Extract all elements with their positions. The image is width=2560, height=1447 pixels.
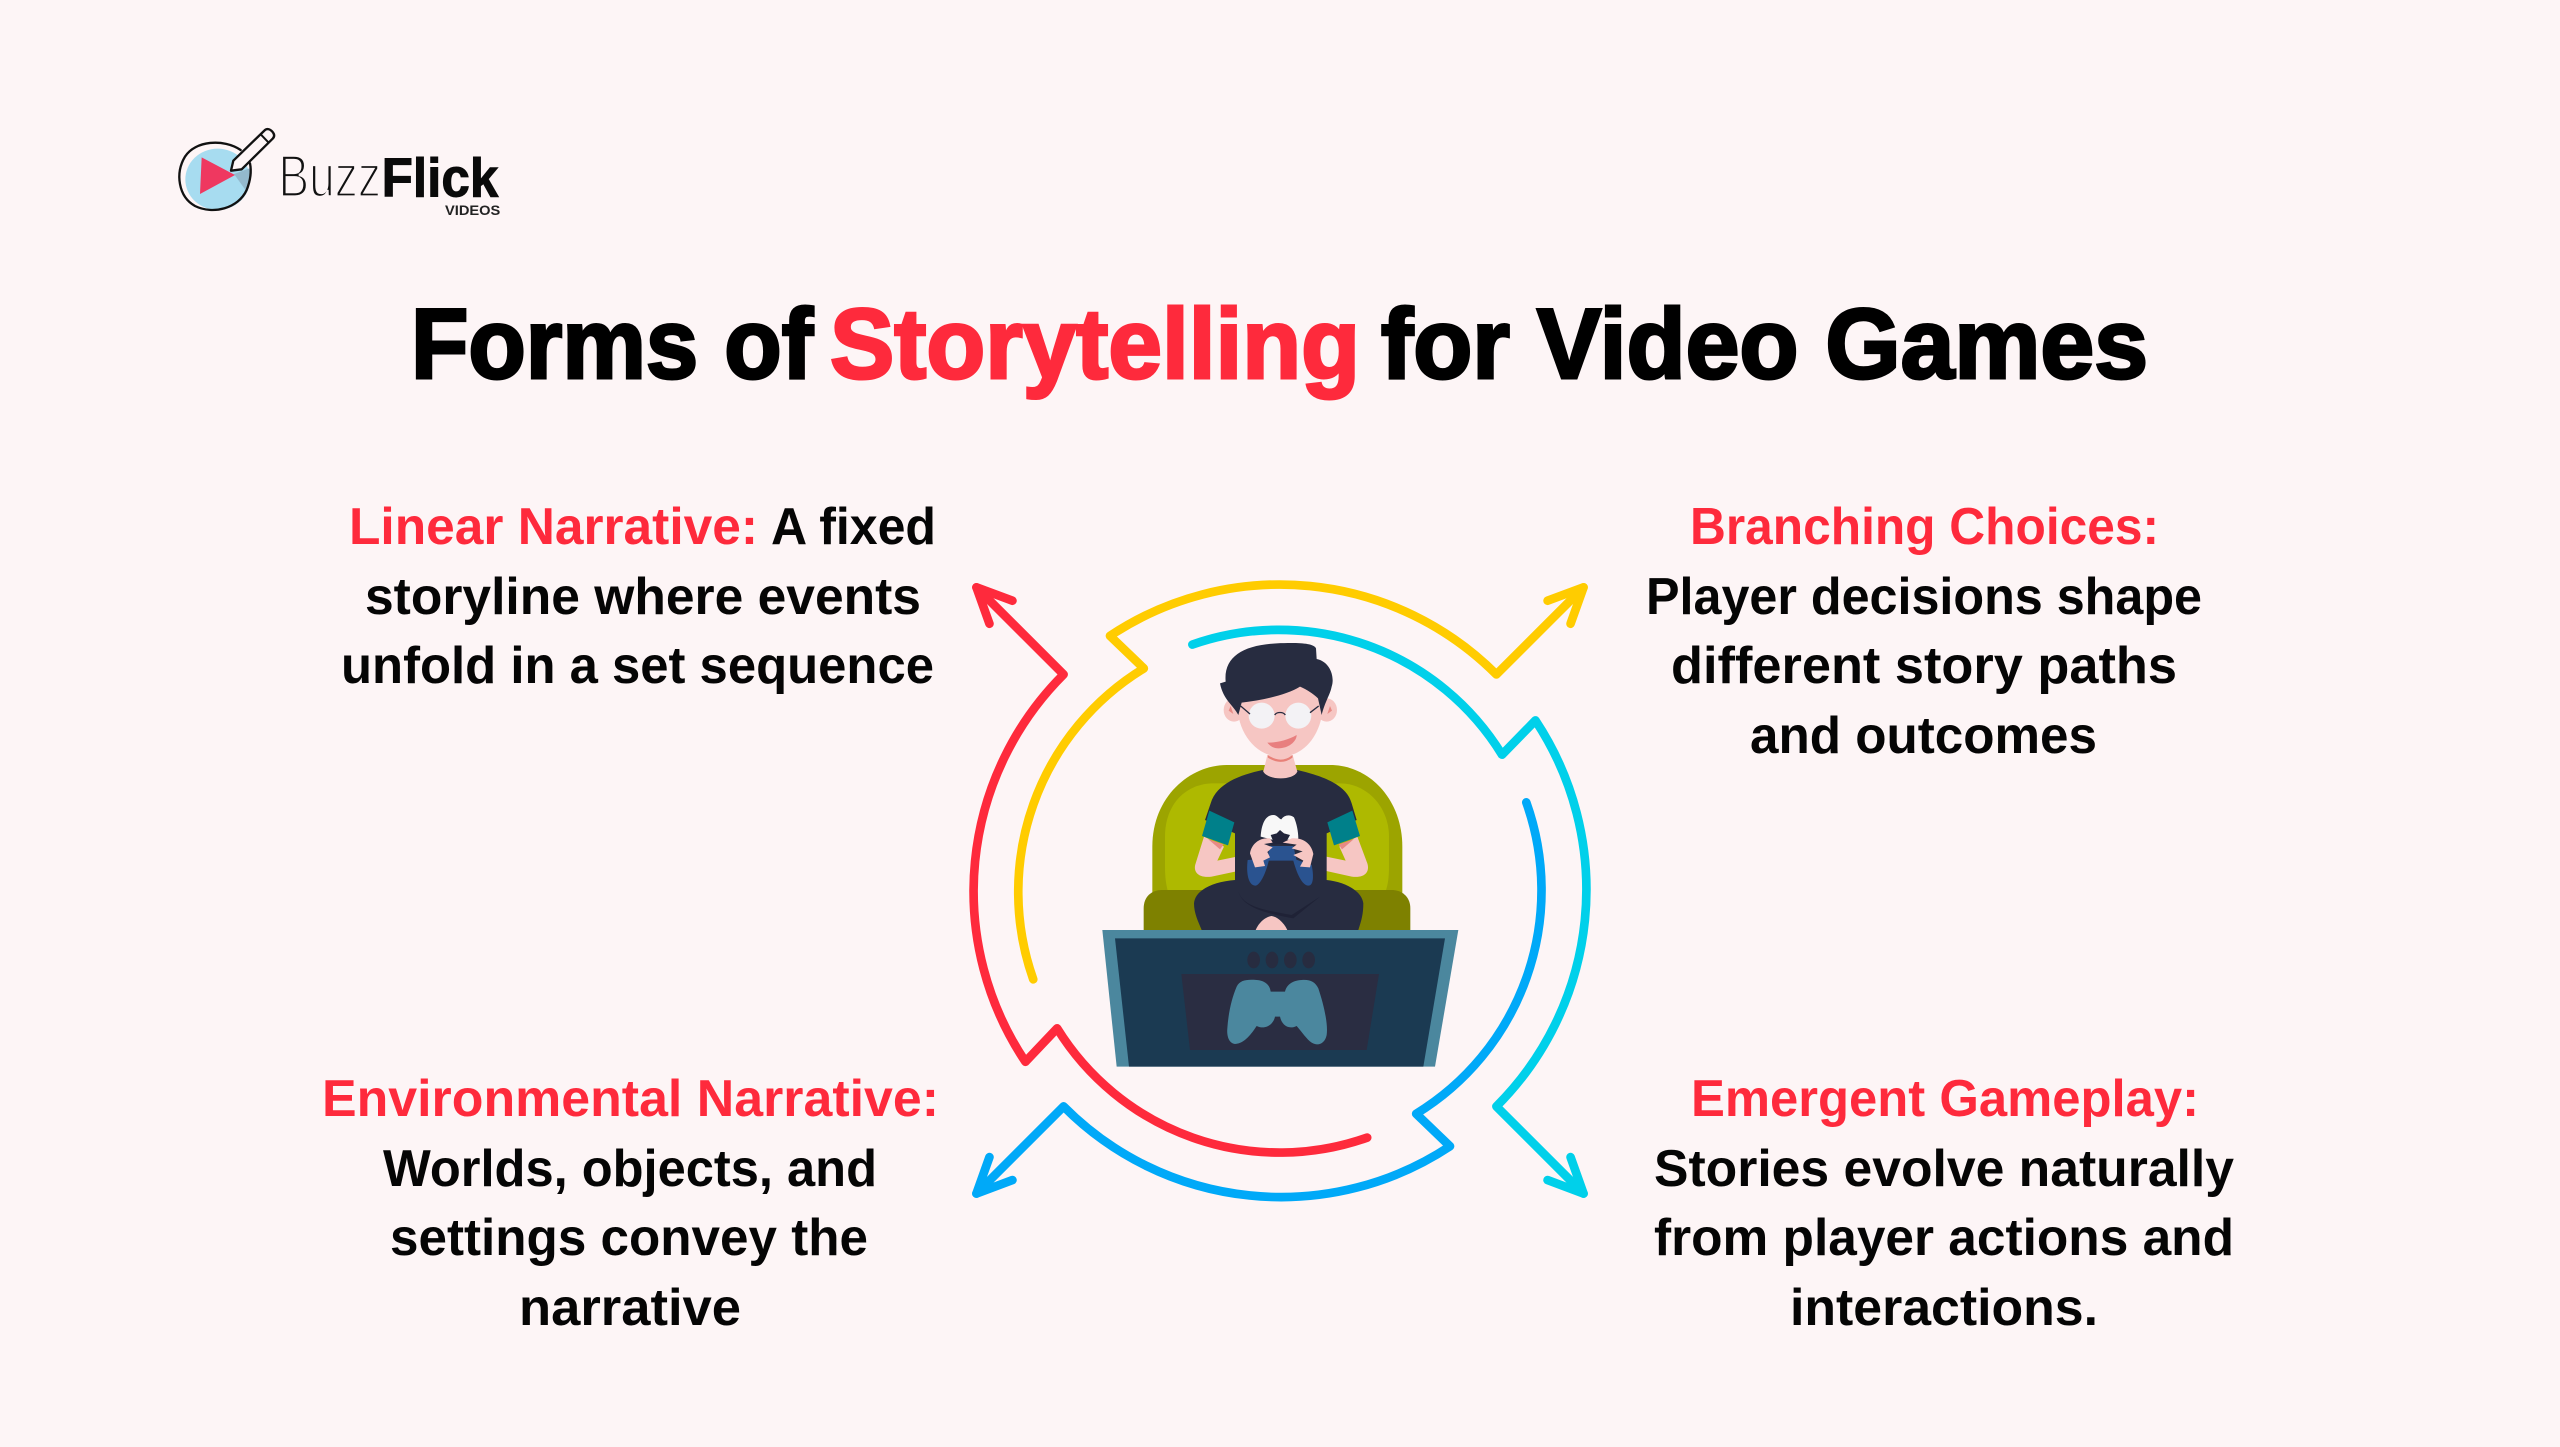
title: Storytelling — [830, 288, 1360, 399]
text block: Branching Choices — [1646, 498, 2202, 765]
text block: Environmental Narrative — [322, 1070, 939, 1337]
text block: Linear Narrative: storyline where events — [365, 568, 921, 626]
arrow: cyan, bottom right — [1192, 630, 1586, 1194]
logo wordmark: Buzz: Buzz — [278, 143, 381, 210]
text block: Linear Narrative — [341, 498, 936, 695]
sleeves — [1202, 811, 1360, 849]
foot — [1256, 916, 1287, 930]
monitor — [1102, 930, 1458, 1067]
logo wordmark: Flick: Flick — [382, 147, 499, 209]
arrow: yellow, top right — [1018, 585, 1584, 979]
arms — [1195, 837, 1368, 877]
title: for Video Games — [1381, 288, 2148, 399]
title — [411, 288, 2148, 399]
circular arrows diagram — [974, 585, 1586, 1197]
text block: Environmental Narrative: settings convey the — [390, 1209, 868, 1267]
face — [1237, 683, 1323, 757]
hair — [1220, 643, 1333, 715]
text block: Linear Narrative: A fixed — [771, 498, 936, 556]
text block: Branching Choices: different story paths — [1671, 637, 2177, 695]
monitor indicator dots — [1247, 952, 1315, 968]
monitor screen — [1181, 974, 1379, 1050]
mouth — [1267, 735, 1297, 748]
torso — [1205, 770, 1357, 887]
text block: Branching Choices: Player decisions shape — [1646, 568, 2202, 626]
icon: gamepad — [1227, 980, 1327, 1044]
legs — [1194, 880, 1363, 930]
text block: Emergent Gameplay: from player actions and — [1654, 1209, 2234, 1267]
controller in hands — [1247, 846, 1313, 886]
text block: Branching Choices: and outcomes — [1750, 707, 2097, 765]
text block: Environmental Narrative: Environmental Narrative: — [322, 1070, 939, 1128]
gamer character — [1194, 643, 1368, 930]
arrow: red, top left — [974, 587, 1367, 1153]
armchair — [1144, 765, 1410, 930]
text block: Linear Narrative: unfold in a set sequence — [341, 637, 934, 695]
logo: BuzzFlick Videos — [179, 129, 500, 218]
neck — [1263, 755, 1297, 778]
hands — [1250, 838, 1313, 867]
text block: Emergent Gameplay: interactions. — [1790, 1279, 2098, 1337]
text block: Branching Choices: Branching Choices: — [1690, 498, 2159, 556]
logo tagline: VIDEOS: VIDEOS — [445, 202, 500, 218]
arrow: blue, bottom left — [976, 802, 1542, 1197]
icon: play button with pencil — [179, 129, 274, 210]
text block: Emergent Gameplay: Stories evolve naturally — [1654, 1140, 2234, 1198]
text block: Environmental Narrative: Worlds, objects, and — [383, 1140, 877, 1198]
illustration: gamer on armchair with monitor — [1102, 643, 1458, 1067]
text block: Emergent Gameplay — [1654, 1070, 2234, 1337]
ears — [1224, 698, 1337, 722]
text block: Linear Narrative: Linear Narrative: — [349, 498, 758, 556]
title: Forms of — [411, 288, 814, 399]
glasses — [1241, 703, 1319, 729]
text block: Emergent Gameplay: Emergent Gameplay: — [1691, 1070, 2199, 1128]
shirt logo — [1261, 815, 1298, 840]
text block: Environmental Narrative: narrative — [519, 1279, 741, 1337]
